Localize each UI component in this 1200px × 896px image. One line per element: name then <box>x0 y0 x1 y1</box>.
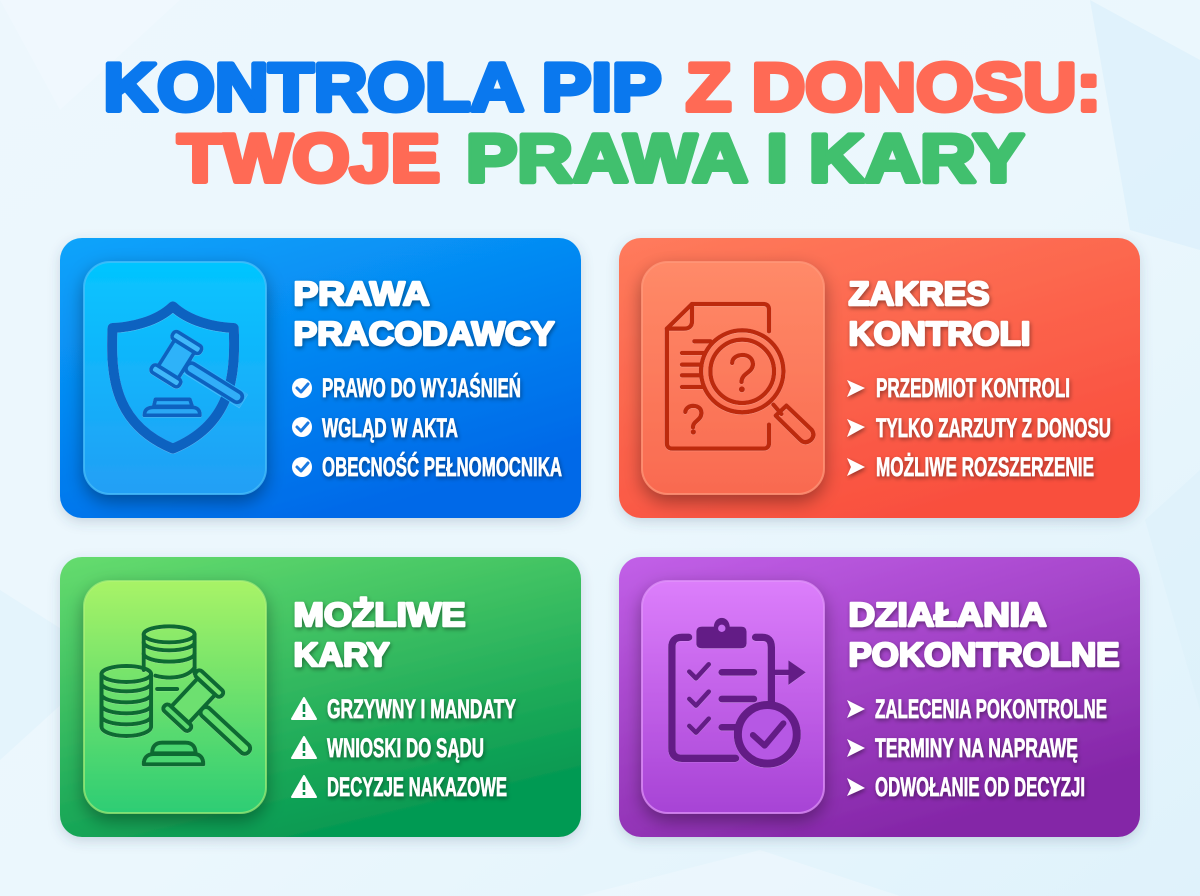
title: KONTROLA PIP <box>104 50 662 126</box>
list: ODWOŁANIE OD DECYZJI <box>875 772 1085 802</box>
title: TWOJE <box>178 120 440 196</box>
heading <box>294 275 554 352</box>
heading: KONTROLI <box>848 315 1030 352</box>
list text: DECYZJE NAKAZOWE <box>327 772 507 802</box>
list text <box>327 694 516 802</box>
heading: ZAKRES <box>848 275 990 312</box>
icon: check <box>292 378 312 398</box>
icon: check <box>292 417 312 437</box>
heading: PRACODAWCY <box>294 315 554 352</box>
list: PRZEDMIOT KONTROLI <box>876 373 1070 403</box>
heading: MOŻLIWE <box>294 596 466 633</box>
list text: PRAWO DO WYJAŚNIEŃ <box>322 373 521 403</box>
list <box>292 694 516 802</box>
icon tile: coins with gavel <box>84 581 267 813</box>
icon tile: shield with gavel <box>84 262 266 494</box>
title <box>104 50 1101 196</box>
heading: POKONTROLNE <box>848 636 1120 673</box>
heading <box>294 596 466 673</box>
heading <box>848 596 1120 673</box>
icon: warning <box>292 737 316 758</box>
list text: WNIOSKI DO SĄDU <box>327 733 484 763</box>
list <box>292 373 562 482</box>
heading <box>848 275 1030 352</box>
panel: dzialania pokontrolne <box>619 557 1140 837</box>
heading: DZIAŁANIA <box>848 596 1046 633</box>
panel: zakres kontroli <box>619 238 1140 518</box>
list <box>847 694 1107 802</box>
title: Z DONOSU: <box>686 50 1101 126</box>
list text: WGLĄD W AKTA <box>322 413 458 443</box>
list text: OBECNOŚĆ PEŁNOMOCNIKA <box>322 452 562 482</box>
panel: mozliwe kary <box>60 557 581 837</box>
icon tile: clipboard <box>642 581 824 813</box>
panel: prawa pracodawcy <box>60 238 581 518</box>
title: PRAWA I KARY <box>466 120 1024 196</box>
icon: check <box>292 457 312 477</box>
list: TERMINY NA NAPRAWĘ <box>875 733 1078 763</box>
heading: KARY <box>294 636 390 673</box>
list text: GRZYWNY I MANDATY <box>327 694 516 724</box>
list text <box>322 373 562 482</box>
list <box>847 373 1111 482</box>
icon: warning <box>292 698 316 719</box>
heading: PRAWA <box>294 275 430 312</box>
icon tile: document with magnifier <box>642 262 824 494</box>
icon: warning <box>292 776 316 797</box>
